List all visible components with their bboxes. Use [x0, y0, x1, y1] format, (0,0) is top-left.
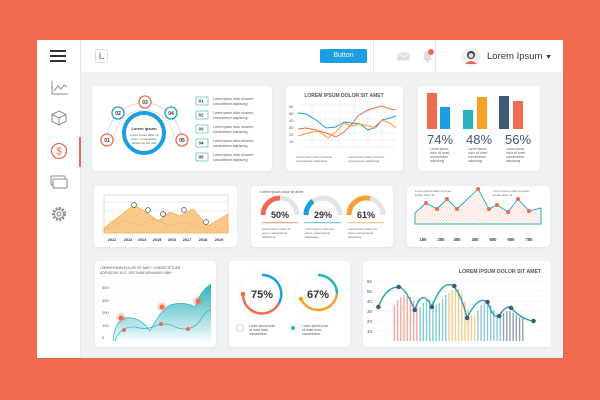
- panel: radial steps: 05: [198, 154, 204, 160]
- panel: half gauges: 50%: [271, 210, 289, 220]
- header: [81, 40, 563, 72]
- panel: bar chart percentages: [418, 86, 540, 171]
- panel: radial steps: 03: [198, 126, 204, 132]
- panel: radial steps: 01: [104, 138, 110, 144]
- panel: hatched area line chart: Lorem ipsum dolor sit amet: [415, 189, 451, 193]
- panel: striped bar curve chart: 10: [367, 329, 373, 334]
- button: [320, 49, 367, 63]
- panel: radial steps: 02: [198, 112, 204, 118]
- panel: hatched area line chart: ipsum dolor sit: [493, 193, 513, 197]
- panel: line chart: 50: [289, 111, 294, 116]
- panel: hatched area line chart: [407, 186, 550, 247]
- panel: donut gauges: consectetuer: [249, 332, 268, 336]
- panel: donut gauges: consectetuer: [302, 332, 321, 336]
- panel: bar chart percentages: 48%: [466, 132, 492, 147]
- panel: bar chart percentages: adipiscing: [468, 159, 482, 163]
- panel: radial steps: 01: [198, 98, 204, 104]
- panel: bar chart percentages: dolor sit amet,: [468, 151, 488, 155]
- panel: half gauges: Lorem ipsum dolor sit: [262, 227, 291, 231]
- panel: area chart years: 2012: [108, 238, 116, 242]
- panel: radial steps: 03: [142, 100, 148, 106]
- panel: half gauges: amet, consectetuer: [305, 231, 331, 235]
- panel: teal area chart: ADIPISCING ELIT, SED DIAM NONUMMY NIBH: [100, 271, 172, 275]
- dashboard window: [37, 40, 563, 358]
- panel: radial steps: 04: [168, 111, 174, 117]
- panel: striped bar curve chart: 40: [367, 299, 373, 304]
- panel: half gauges: adipiscing: [262, 235, 276, 239]
- panel: line chart: 40: [289, 118, 294, 123]
- icon: cards: [50, 176, 68, 188]
- panel: line chart: consectetuer adipiscing: [296, 159, 328, 163]
- logo: [95, 49, 108, 63]
- panel: area chart years: 2017: [183, 238, 191, 242]
- panel: hatched area line chart: 600: [508, 237, 515, 242]
- panel: bar chart percentages: 56%: [505, 132, 531, 147]
- panel: area chart years: 2018: [199, 238, 207, 242]
- panel: half gauges: adipiscing: [348, 235, 362, 239]
- panel: bar chart percentages: dolor sit amet,: [506, 151, 526, 155]
- panel: hatched area line chart: ipsum dolor sit: [415, 193, 435, 197]
- panel: donut gauges: sit amet dolor,: [249, 328, 269, 332]
- button: Button: [333, 52, 354, 59]
- panel: radial steps: 04: [198, 140, 204, 146]
- panel: hatched area line chart: 400: [472, 237, 479, 242]
- panel: bar chart percentages: consectetuer: [506, 155, 525, 159]
- panel: line chart: [286, 86, 403, 171]
- panel: half gauges: 61%: [357, 210, 375, 220]
- icon: mail: [398, 52, 410, 60]
- user name: Lorem Ipsum ▼: [487, 51, 552, 62]
- panel: line chart: Lorem ipsum dolor sit amet,: [296, 155, 333, 159]
- panel: striped bar curve chart: 60: [367, 279, 373, 284]
- panel: half gauges: adipiscing: [305, 235, 319, 239]
- panel: area chart years: 2019: [215, 238, 223, 242]
- panel: teal area chart: 200: [102, 310, 109, 315]
- panel: radial steps: Lorem ipsum dolor sit amet,: [213, 139, 254, 143]
- panel: line chart: 10: [289, 139, 294, 144]
- panel: half gauges: [251, 186, 393, 247]
- icon: cube: [52, 110, 66, 126]
- panel: radial steps: 02: [115, 111, 121, 117]
- panel: area chart years: 2013: [124, 238, 132, 242]
- panel: donut gauges: 67%: [307, 289, 329, 301]
- panel: bar chart percentages: dolor sit amet,: [430, 151, 450, 155]
- panel: area chart years: 2014: [138, 238, 147, 242]
- panel: radial steps: consectetuer adipiscing: [213, 130, 248, 134]
- panel: teal area chart: 100: [102, 323, 109, 328]
- panel: teal area chart: [95, 261, 216, 347]
- panel: radial steps: consectetuer adipiscing: [213, 102, 248, 106]
- panel: radial steps: adipiscing elit, sed: [132, 141, 157, 145]
- panel: donut gauges: 75%: [251, 289, 273, 301]
- panel: radial steps: consectetuer adipiscing: [213, 158, 248, 162]
- user avatar: [462, 48, 480, 66]
- icon: gear: [52, 207, 66, 221]
- panel: radial steps: consectetuer adipiscing: [213, 116, 248, 120]
- panel: area chart years: [94, 186, 237, 247]
- panel: half gauges: Lorem ipsum dolor sit: [305, 227, 334, 231]
- panel: line chart: consectetuer adipiscing: [348, 159, 380, 163]
- logo: L: [99, 51, 104, 61]
- panel: radial steps: amet, consectetuer: [131, 137, 157, 141]
- panel: bar chart percentages: adipiscing: [430, 159, 444, 163]
- panel: half gauges: amet, consectetuer: [262, 231, 288, 235]
- panel: bar chart percentages: Lorem ipsum: [430, 147, 449, 151]
- icon: dollar active: [50, 142, 68, 160]
- panel: hatched area line chart: 700: [526, 237, 533, 242]
- panel: hatched area line chart: Lorem ipsum dolor sit amet: [493, 189, 529, 193]
- panel: bar chart percentages: 74%: [427, 132, 453, 147]
- panel: hatched area line chart: 300: [454, 237, 461, 242]
- panel: hatched area line chart: 200: [438, 237, 445, 242]
- panel: hatched area line chart: 100: [420, 237, 427, 242]
- panel: donut gauges: Lorem ipsum dolor: [302, 324, 329, 328]
- panel: teal area chart: LOREM IPSUM DOLOR SIT AMET, CONSECTETUER: [100, 266, 181, 270]
- panel: radial steps: Lorem ipsum dolor sit amet,: [213, 125, 254, 129]
- panel: line chart: 30: [289, 125, 294, 130]
- icon: bell with badge: [423, 49, 434, 62]
- panel: half gauges: amet, consectetuer: [348, 231, 374, 235]
- panel: line chart: LOREM IPSUM DOLOR SIT AMET: [304, 93, 384, 99]
- panel: radial steps: Lorem ipsum: [131, 126, 157, 131]
- panel: radial steps: Lorem ipsum dolor sit amet,: [213, 111, 254, 115]
- panel: area chart years: 2016: [168, 238, 176, 242]
- panel: radial steps: [92, 86, 272, 171]
- panel: bar chart percentages: consectetuer: [430, 155, 449, 159]
- panel: bar chart percentages: Lorem ipsum: [468, 147, 487, 151]
- panel: donut gauges: Lorem ipsum dolor: [249, 324, 276, 328]
- active indicator: [79, 137, 81, 167]
- icon: dollar active: $: [56, 146, 62, 158]
- panel: radial steps: consectetuer adipiscing: [213, 144, 248, 148]
- panel: striped bar curve chart: 50: [367, 289, 373, 294]
- panel: donut gauges: sit amet dolor,: [302, 328, 322, 332]
- panel: teal area chart: 0: [102, 335, 105, 340]
- panel: area chart years: 2015: [153, 238, 161, 242]
- panel: half gauges: Lorem ipsum dolor sit amet: [260, 190, 303, 194]
- panel: bar chart percentages: adipiscing: [506, 159, 520, 163]
- panel: radial steps: Lorem ipsum dolor sit: [130, 133, 158, 137]
- panel: bar chart percentages: consectetuer: [468, 155, 487, 159]
- panel: striped bar curve chart: LOREM IPSUM DOLOR SIT AMET: [459, 269, 542, 275]
- panel: donut gauges: [229, 261, 350, 347]
- panel: hatched area line chart: 500: [490, 237, 497, 242]
- panel: radial steps: 05: [179, 138, 185, 144]
- panel: radial steps: Lorem ipsum dolor sit amet,: [213, 153, 254, 157]
- panel: line chart: Lorem ipsum dolor sit amet,: [348, 155, 385, 159]
- panel: teal area chart: 300: [102, 298, 109, 303]
- panel: line chart: 20: [289, 132, 294, 137]
- panel: teal area chart: 400: [102, 285, 109, 290]
- panel: radial steps: Lorem ipsum dolor sit amet,: [213, 97, 254, 101]
- panel: bar chart percentages: Lorem ipsum: [506, 147, 525, 151]
- panel: striped bar curve chart: 20: [367, 319, 373, 324]
- panel: striped bar curve chart: 30: [367, 309, 373, 314]
- panel: striped bar curve chart: [363, 261, 551, 347]
- sidebar: [37, 40, 81, 358]
- icon: line chart: [52, 81, 68, 94]
- panel: half gauges: Lorem ipsum dolor sit: [348, 227, 377, 231]
- panel: line chart: 60: [289, 104, 294, 109]
- panel: half gauges: 29%: [314, 210, 332, 220]
- icon: hamburger menu: [50, 50, 66, 62]
